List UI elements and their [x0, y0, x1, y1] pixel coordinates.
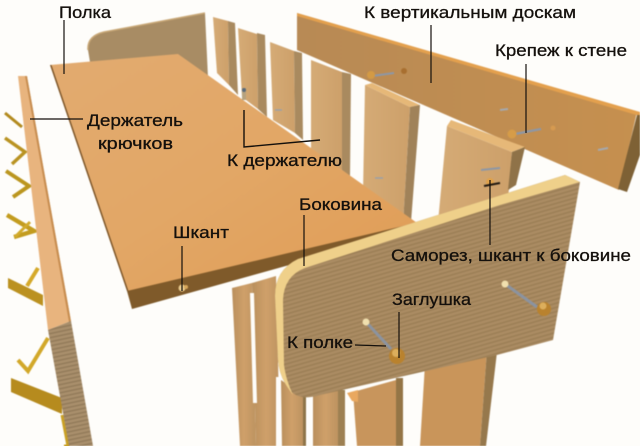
icon: rail screw left [367, 68, 407, 79]
board screw on shelf [242, 88, 246, 100]
top rail: to vertical boards [297, 13, 640, 192]
callout: Полка: Полка [59, 3, 112, 22]
hook holder end [48, 321, 93, 446]
vertical board 4 [311, 60, 351, 177]
icon: panel pin right [502, 280, 551, 316]
callout: Шкант: Шкант [173, 223, 229, 242]
callout: К держателю: К держателю [227, 151, 342, 170]
callout: Полка [59, 3, 112, 74]
callout: Заглушка [392, 290, 472, 358]
shelf [50, 54, 420, 309]
callout: К вертикальным доскам: К вертикальным доскам [364, 3, 576, 22]
hook holder face [18, 76, 71, 330]
callout: Шкант [173, 223, 229, 291]
vertical board 6 [438, 120, 525, 222]
callout: К держателю [227, 110, 342, 170]
callout: Саморез, шкант к боковине: Саморез, шкант к боковине [391, 246, 631, 265]
callout: Держатель крючков: крючков [98, 134, 173, 153]
panel top edge [275, 175, 580, 395]
hook holder [5, 76, 93, 446]
callout: К полке [287, 333, 386, 352]
back side panel [88, 13, 208, 78]
callout: Заглушка: Заглушка [392, 290, 472, 309]
vertical board 3 [270, 42, 303, 140]
vertical board 2 [238, 28, 267, 117]
callout: К полке: К полке [287, 333, 353, 352]
callout: Крепеж к стене [495, 41, 627, 133]
vertical board 1 [213, 17, 238, 95]
icon: panel pin left [362, 318, 405, 364]
lower vertical boards [232, 276, 497, 446]
callout: Держатель крючков [30, 111, 183, 153]
icon: dowel [178, 284, 188, 292]
icon: rail screw right [500, 109, 608, 150]
callout: Держатель крючков: Держатель [87, 111, 183, 130]
front side panel [275, 175, 580, 397]
vertical board 5 [363, 83, 420, 225]
callout: Боковина: Боковина [299, 195, 383, 214]
callout: Боковина [299, 195, 383, 266]
callout: Крепеж к стене: Крепеж к стене [495, 41, 627, 60]
